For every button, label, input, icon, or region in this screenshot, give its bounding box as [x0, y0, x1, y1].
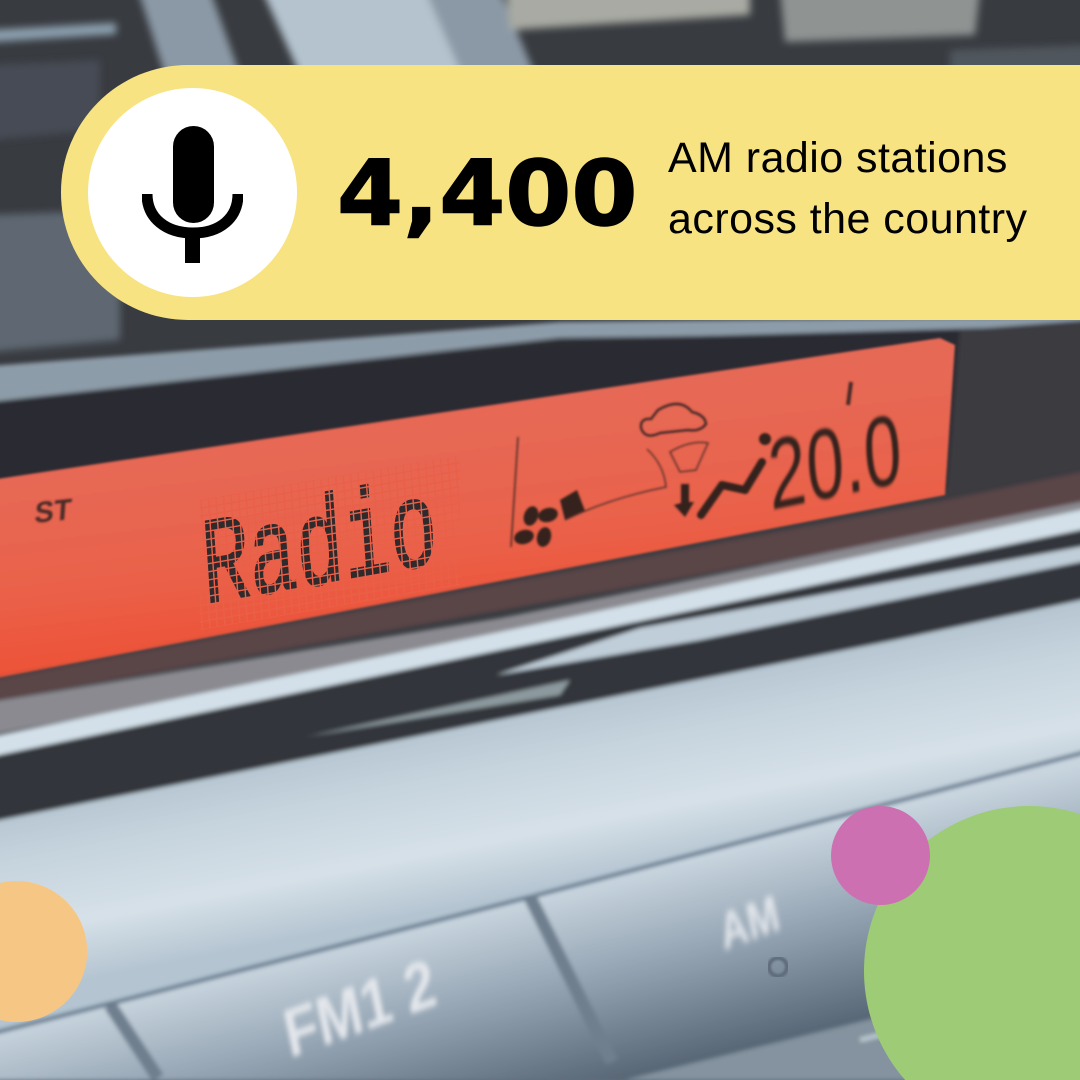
- display: Radio text: Radio: [198, 461, 442, 642]
- display: temperature reading: 20.0: [765, 393, 906, 532]
- big number: 4,400: [337, 142, 638, 246]
- stat description: AM radio stations: [668, 134, 1008, 182]
- decorative circle: orange: [0, 881, 87, 1022]
- display: ST indicator: ST: [34, 494, 73, 530]
- display: climate icons: [511, 382, 851, 548]
- icon: microphone in white circle: [88, 88, 297, 297]
- blurred FM button label: FM1 2: [278, 945, 442, 1073]
- stat banner: [61, 65, 1080, 320]
- stat description: [668, 134, 1027, 243]
- decorative circle: green: [864, 806, 1080, 1080]
- blurred AM button label: AM: [714, 884, 784, 961]
- button indicator light: [769, 958, 787, 976]
- red LCD display: [0, 338, 955, 680]
- stat description: across the country: [668, 195, 1027, 243]
- decorative circle: pink: [831, 806, 930, 905]
